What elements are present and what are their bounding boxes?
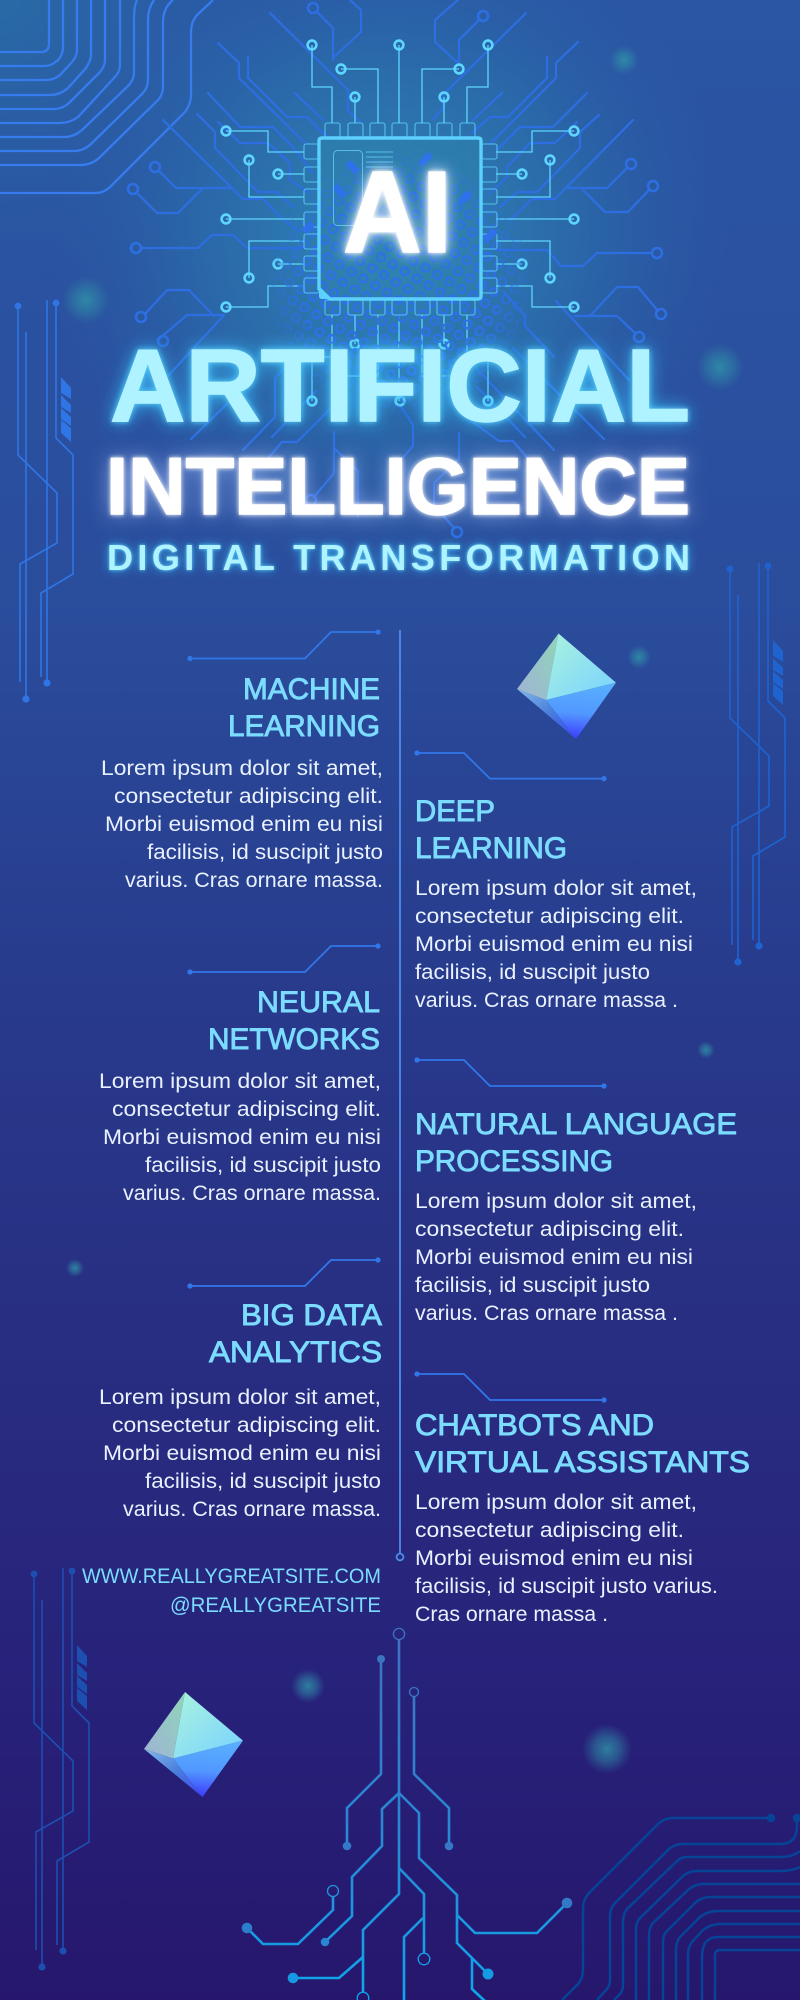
body text [99,1070,381,1205]
body text [415,877,697,1012]
body text: varius. Cras ornare massa. [123,1182,381,1205]
heading: LEARNING [415,832,567,865]
heading [208,986,380,1056]
body text: Cras ornare massa . [415,1603,608,1626]
panel: natural language processing [414,1057,737,1325]
body text: varius. Cras ornare massa. [125,869,383,892]
heading [228,673,380,743]
connector [414,1371,607,1403]
panel: machine learning [101,629,383,892]
body text: Lorem ipsum dolor sit amet, [101,757,383,780]
body text: varius. Cras ornare massa . [415,1302,678,1325]
heading: ANALYTICS [209,1336,382,1369]
connector [414,750,607,781]
body text: facilisis, id suscipit justo [415,961,650,984]
body text: Lorem ipsum dolor sit amet, [415,877,697,900]
panel: big data analytics [99,1257,382,1521]
body text [415,1190,697,1325]
website and handle [82,1565,381,1617]
circuit: right side [727,563,785,965]
heading [415,795,567,865]
body text: facilisis, id suscipit justo varius. [415,1575,718,1598]
icon: gem bottom [144,1692,243,1797]
body text: consectetur adipiscing elit. [112,1414,381,1437]
glow blobs [62,45,744,1774]
circuit: left side lower [31,1568,89,1970]
body text: consectetur adipiscing elit. [112,1098,381,1121]
body text: facilisis, id suscipit justo [145,1154,381,1177]
circuit: left side upper [15,300,73,702]
chip notch [319,286,332,299]
chip body [320,138,480,300]
body text: Lorem ipsum dolor sit amet, [99,1386,381,1409]
AI label: AI [343,147,452,277]
body text: Lorem ipsum dolor sit amet, [99,1070,381,1093]
heading: VIRTUAL ASSISTANTS [415,1446,750,1479]
circuit: top-left corner traces [0,0,213,193]
panel: deep learning [414,750,697,1012]
heading: NEURAL [257,986,380,1019]
body text: Morbi euismod enim eu nisi [103,1126,381,1149]
body text: facilisis, id suscipit justo [415,1274,650,1297]
heading: LEARNING [228,710,380,743]
connector [187,1257,381,1289]
body text [99,1386,381,1521]
body text: varius. Cras ornare massa. [123,1498,381,1521]
body text: consectetur adipiscing elit. [415,1218,684,1241]
body text: varius. Cras ornare massa . [415,989,678,1012]
body text: Lorem ipsum dolor sit amet, [415,1491,697,1514]
heading: NETWORKS [208,1023,380,1056]
body text: facilisis, id suscipit justo [147,841,383,864]
heading: DEEP [415,795,495,828]
connector [187,943,381,975]
body text: consectetur adipiscing elit. [114,785,383,808]
connector [187,629,381,661]
chip teal connection traces [222,41,578,405]
body text: Morbi euismod enim eu nisi [415,933,693,956]
circuit: bottom-right corner traces [562,1815,800,2000]
body text: consectetur adipiscing elit. [415,905,684,928]
chip pads [304,123,497,315]
panel: chatbots and virtual assistants [414,1371,750,1626]
heading: CHATBOTS AND [415,1409,654,1442]
connector [414,1057,607,1089]
icon: AI microchip [222,41,578,430]
body text: Morbi euismod enim eu nisi [415,1547,693,1570]
body text [101,757,383,892]
chip ring pattern [271,156,532,414]
central divider line [397,630,403,1560]
title: ARTIFICIAL: ARTIFICIAL [110,328,690,443]
website and handle: WWW.REALLYGREATSITE.COM [82,1565,381,1588]
icon: gem top [517,634,616,739]
heading [209,1299,382,1369]
panel: neural networks [99,943,381,1205]
chip frame [319,138,481,299]
title: INTELLIGENCE: INTELLIGENCE [106,442,690,532]
chip inner panel [334,150,393,226]
heading: MACHINE [243,673,380,706]
circuit: bottom center tree [242,1628,572,2000]
website and handle: @REALLYGREATSITE [170,1594,381,1617]
body text: Lorem ipsum dolor sit amet, [415,1190,697,1213]
heading: NATURAL LANGUAGE [415,1108,737,1141]
body text: consectetur adipiscing elit. [415,1519,684,1542]
subtitle: digital transformation: DIGITAL TRANSFORMATION [107,537,690,578]
body text: Morbi euismod enim eu nisi [415,1246,693,1269]
heading: PROCESSING [415,1145,613,1178]
heading [415,1409,750,1479]
body text [415,1491,718,1626]
heading: BIG DATA [241,1299,382,1332]
circuit: background traces around chip [128,0,666,537]
body text: Morbi euismod enim eu nisi [103,1442,381,1465]
chip dashes [302,152,498,243]
body text: facilisis, id suscipit justo [145,1470,381,1493]
heading [415,1108,737,1178]
body text: Morbi euismod enim eu nisi [105,813,383,836]
